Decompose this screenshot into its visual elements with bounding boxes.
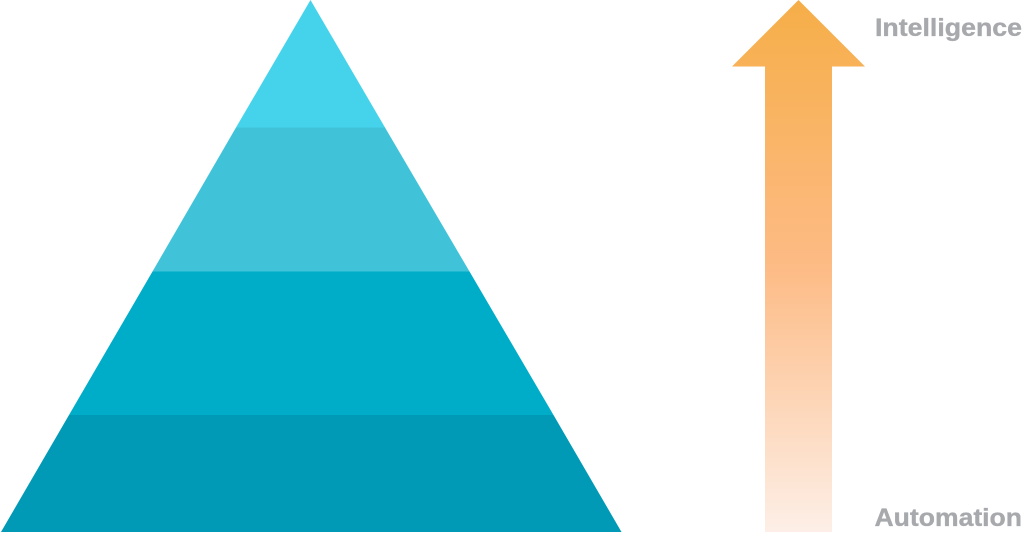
label: Automation: Automation [874, 504, 1022, 532]
pyramid tier 1: top [236, 0, 385, 128]
pyramid tier 2 [152, 128, 470, 272]
arrow: automation to intelligence [732, 0, 865, 532]
pyramid tier 3 [69, 272, 554, 415]
pyramid tier 4: base [1, 415, 622, 532]
label: Intelligence: Intelligence [875, 14, 1022, 42]
pyramid [1, 0, 622, 532]
